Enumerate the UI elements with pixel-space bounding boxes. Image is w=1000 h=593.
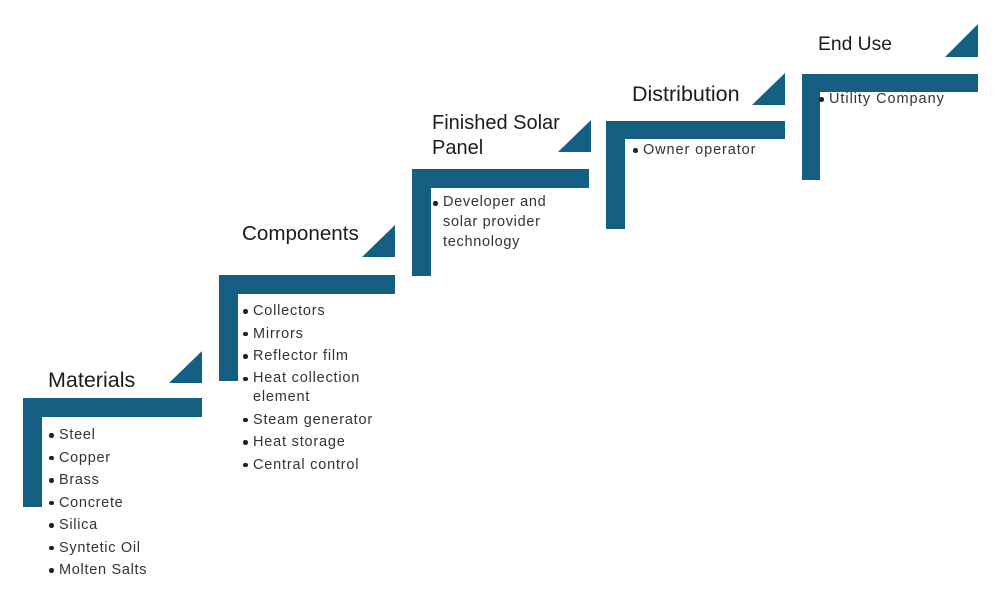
list: components: Collectors (253, 303, 325, 319)
list: distribution: Owner operator (643, 142, 756, 158)
list: finished solar panel: solar provider (443, 214, 541, 230)
heading: materials: Materials (48, 368, 135, 392)
bracket: end use (802, 74, 978, 180)
list: components (243, 303, 373, 472)
bracket: distribution (606, 121, 785, 229)
list: end use: Utility Company (829, 91, 945, 107)
list: materials: Molten Salts (59, 562, 147, 578)
list: materials: Brass (59, 472, 100, 488)
heading: finished solar panel: Finished Solar (432, 112, 560, 134)
list: materials: Steel (59, 427, 96, 443)
heading: end use: End Use (818, 34, 892, 54)
heading: components: Components (242, 222, 359, 245)
list: finished solar panel (433, 194, 546, 250)
list: components: element (253, 388, 310, 404)
list: components: Central control (253, 456, 359, 472)
list: components: Heat collection (253, 370, 360, 386)
list: components: Steam generator (253, 412, 373, 428)
bracket: components (219, 275, 395, 381)
heading: distribution: Distribution (632, 82, 740, 106)
list: finished solar panel: technology (443, 234, 520, 250)
triangle: finished solar panel (558, 120, 591, 152)
bracket: finished solar panel (412, 169, 589, 276)
list: materials: Copper (59, 450, 111, 466)
list: components: Mirrors (253, 326, 304, 342)
list: materials: Concrete (59, 494, 123, 510)
triangle: materials (169, 351, 202, 383)
bracket: materials (23, 398, 202, 507)
list: components: Heat storage (253, 434, 346, 450)
heading: finished solar panel: Panel (432, 136, 483, 158)
list: components: Reflector film (253, 348, 349, 364)
triangle: distribution (752, 73, 785, 105)
list: materials: Silica (59, 517, 98, 533)
triangle: end use (945, 24, 978, 57)
triangle: components (362, 225, 395, 257)
list: materials: Syntetic Oil (59, 540, 141, 556)
list: finished solar panel: Developer and (443, 194, 546, 210)
list: materials (49, 427, 147, 578)
heading: finished solar panel (432, 112, 560, 158)
